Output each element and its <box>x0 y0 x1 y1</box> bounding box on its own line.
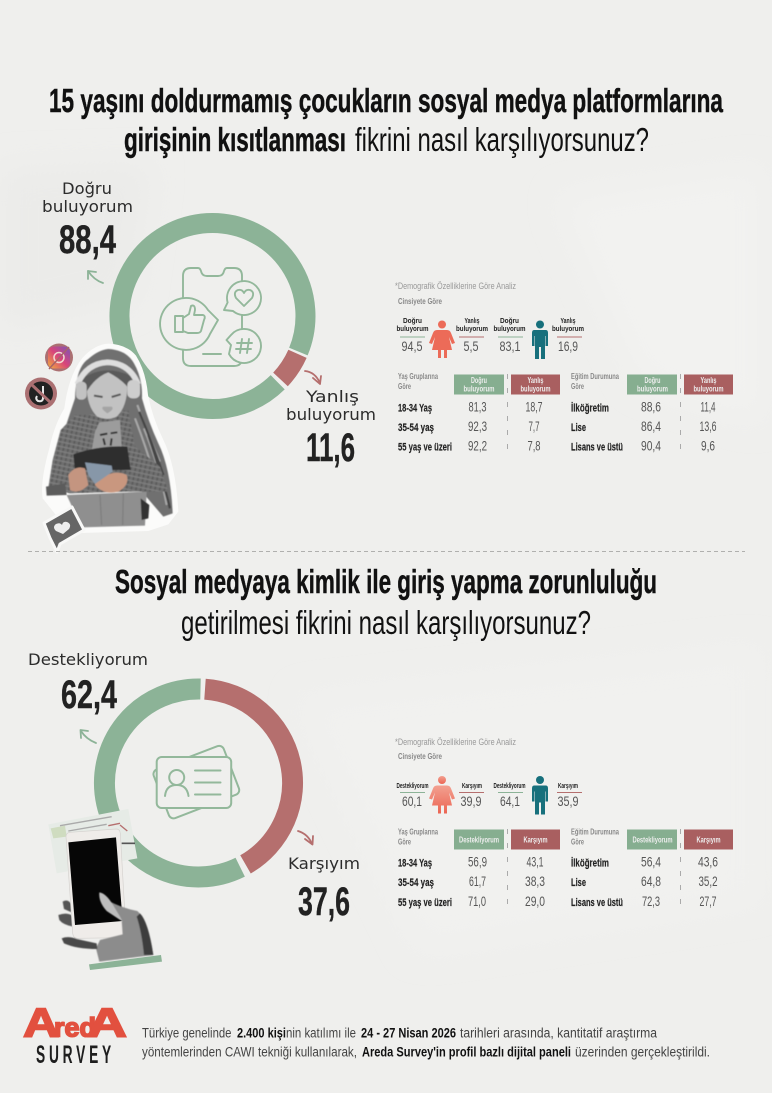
table: age groups: 18-34 Yaş <box>398 858 432 870</box>
arrow: red two <box>298 831 313 844</box>
gender: women support: Destekliyorum <box>396 781 429 790</box>
gender: women disagree: 5,5 <box>464 338 479 354</box>
demographics panel: question one <box>395 281 733 458</box>
table: education: 13,6 <box>700 418 717 434</box>
icon: woman <box>429 776 455 814</box>
table: age groups: 55 yaş ve üzeri <box>398 897 452 909</box>
gender: women agree: Doğru <box>403 316 422 325</box>
label: yanlış buluyorum 11,6: buluyorum <box>286 405 376 424</box>
table: education: Lise <box>571 877 586 889</box>
gender: women agree: buluyorum <box>396 324 429 333</box>
icon: phone with social bubbles <box>160 268 261 366</box>
table: education: Doğru <box>644 376 661 385</box>
table: education: 9,6 <box>701 438 715 454</box>
table: age groups: 61,7 <box>469 873 486 889</box>
table: age groups: Yaş Gruplarına <box>398 826 438 836</box>
table: age groups: Doğru <box>471 376 487 385</box>
table: education: 11,4 <box>700 398 716 414</box>
icon: id cards <box>152 744 241 820</box>
footer: methodology note: üzerinden gerçekleştirildi. <box>575 1044 710 1060</box>
table: education: 27,7 <box>700 893 717 909</box>
label: yanlış buluyorum 11,6: Yanlış <box>305 387 359 406</box>
table: education: Eğitim Durumuna <box>571 371 619 381</box>
table: age groups <box>398 371 560 458</box>
label: doğru buluyorum 88,4: Doğru <box>62 179 112 198</box>
table: age groups: 92,3 <box>468 418 487 434</box>
gender: men agree: Doğru <box>500 316 519 325</box>
table: education: Göre <box>571 836 584 846</box>
gender: men disagree <box>552 316 584 354</box>
footer: methodology note: yöntemlerinden CAWI tekniği kullanılarak, <box>142 1044 357 1060</box>
table: age groups: 43,1 <box>526 854 544 870</box>
photo: girl with phone <box>42 344 178 533</box>
table: age groups: Destekliyorum <box>459 836 499 844</box>
table: education: Yanlış <box>700 376 717 385</box>
table: age groups: 92,2 <box>468 438 487 454</box>
table: age groups: Yaş Gruplarına <box>398 371 438 381</box>
footer: methodology note: Türkiye genelinde <box>142 1026 232 1040</box>
gender: men agree: 83,1 <box>500 338 521 354</box>
table: age groups: Göre <box>398 836 411 846</box>
note heading: *Demografik Özelliklerine Göre Analiz <box>395 281 516 291</box>
donut chart: question one <box>119 223 305 409</box>
label: yanlış buluyorum 11,6 <box>286 387 376 470</box>
gender: men support <box>494 781 526 809</box>
label: destekliyorum 62,4: 62,4 <box>61 673 118 717</box>
table: education: İlköğretim <box>571 402 609 414</box>
table: age groups: 35-54 yaş <box>398 422 434 434</box>
gender: men disagree: 16,9 <box>558 338 578 354</box>
gender: men oppose <box>557 781 582 809</box>
table: education: Eğitim Durumuna <box>571 826 619 836</box>
table: age groups: 56,9 <box>468 854 487 870</box>
gender: women oppose: 39,9 <box>460 793 482 809</box>
icon: man <box>532 776 548 814</box>
table: age groups: 18,7 <box>526 398 543 414</box>
table: age groups: 7,8 <box>528 438 541 454</box>
table: age groups: Göre <box>398 381 411 391</box>
table: education: 56,4 <box>641 854 661 870</box>
gender: women agree: 94,5 <box>402 338 423 354</box>
table: education <box>571 371 733 458</box>
logo: areda survey: red <box>54 1012 96 1042</box>
table: education: 90,4 <box>641 438 661 454</box>
gender heading: Cinsiyete Göre <box>398 751 442 761</box>
icon: instagram badge <box>45 344 73 372</box>
note heading: *Demografik Özelliklerine Göre Analiz <box>395 737 516 747</box>
label: karşıyım 37,6 <box>288 854 360 924</box>
logo: areda survey <box>23 1000 127 1069</box>
label: doğru buluyorum 88,4: buluyorum <box>42 197 133 216</box>
gender: women disagree: Yanlış <box>464 316 480 325</box>
gender: men agree: buluyorum <box>494 324 526 333</box>
gender: men support: Destekliyorum <box>494 781 526 790</box>
label: doğru buluyorum 88,4 <box>42 179 133 262</box>
table: education: Lisans ve üstü <box>571 897 623 909</box>
table: age groups <box>398 826 560 913</box>
donut chart: question two <box>104 689 293 877</box>
label: destekliyorum 62,4 <box>28 650 148 717</box>
gender: women support: 60,1 <box>402 793 422 809</box>
gender: women support <box>396 781 429 809</box>
footer: methodology note: 24 - 27 Nisan 2026 <box>361 1026 456 1040</box>
gender: men oppose: 35,9 <box>558 793 579 809</box>
table: age groups: buluyorum <box>464 384 494 394</box>
gender: women disagree: buluyorum <box>456 324 488 333</box>
title: question one: girişinin kısıtlanması <box>124 121 346 158</box>
title: question one: fikrini nasıl karşılıyorsunuz? <box>355 121 649 158</box>
table: education: buluyorum <box>637 384 668 394</box>
table: age groups: 55 yaş ve üzeri <box>398 442 452 454</box>
table: age groups: 29,0 <box>525 893 545 909</box>
table: age groups: 18-34 Yaş <box>398 402 432 414</box>
arrow: green one <box>88 271 103 283</box>
table: age groups: Yanlış <box>528 376 544 385</box>
table: education <box>571 826 733 913</box>
gender: women oppose: Karşıyım <box>462 781 482 790</box>
icon: man <box>532 320 548 359</box>
gender: men support: 64,1 <box>500 793 520 809</box>
gender: women oppose <box>459 781 484 809</box>
demographics panel: question two <box>395 737 733 913</box>
label: karşıyım 37,6: 37,6 <box>298 880 350 924</box>
footer: methodology note: 2.400 kişi <box>237 1026 286 1040</box>
icon: heart message tag <box>44 507 84 552</box>
table: education: 86,4 <box>641 418 661 434</box>
table: education: Destekliyorum <box>632 836 672 844</box>
label: doğru buluyorum 88,4: 88,4 <box>59 218 117 262</box>
label: destekliyorum 62,4: Destekliyorum <box>28 650 148 669</box>
gender: women agree <box>396 316 429 354</box>
table: age groups: 81,3 <box>468 398 487 414</box>
footer: methodology note: Areda Survey'in profil bazlı dijital paneli <box>362 1044 571 1060</box>
label: karşıyım 37,6: Karşıyım <box>288 854 360 873</box>
table: education: Lisans ve üstü <box>571 442 623 454</box>
table: age groups: Karşıyım <box>524 836 548 844</box>
table: education: Göre <box>571 381 584 391</box>
arrow: green two <box>80 730 96 743</box>
table: education: 72,3 <box>642 893 660 909</box>
gender: men agree <box>494 316 526 354</box>
table: age groups: 71,0 <box>468 893 486 909</box>
title: question two: getirilmesi fikrini nasıl karşılıyorsunuz? <box>181 604 591 641</box>
gender heading: Cinsiyete Göre <box>398 296 442 306</box>
logo: areda survey: A <box>23 1000 59 1046</box>
table: education: buluyorum <box>694 384 724 394</box>
arrow: red one <box>305 371 321 384</box>
gender: men disagree: Yanlış <box>560 316 576 325</box>
table: education: 64,8 <box>641 873 661 889</box>
footer: methodology note <box>142 1026 710 1060</box>
table: age groups: 7,7 <box>528 418 540 434</box>
table: education: 43,6 <box>698 854 718 870</box>
table: education: 35,2 <box>698 873 718 889</box>
footer: methodology note: tarihleri arasında, kantitatif araştırma <box>460 1026 657 1040</box>
gender: women disagree <box>456 316 488 354</box>
table: education: İlköğretim <box>571 856 609 870</box>
label: yanlış buluyorum 11,6: 11,6 <box>306 426 355 470</box>
icon: woman <box>429 320 455 358</box>
table: age groups: 38,3 <box>525 873 545 889</box>
table: education: Karşıyım <box>696 836 720 844</box>
table: age groups: 35-54 yaş <box>398 877 434 889</box>
icon: tiktok banned badge <box>25 378 57 410</box>
table: age groups: buluyorum <box>520 384 550 394</box>
photo: hand holding phone with id card <box>48 809 162 970</box>
title: question two <box>115 563 657 641</box>
table: education: Lise <box>571 422 586 434</box>
table: education: 88,6 <box>641 398 661 414</box>
gender: men disagree: buluyorum <box>552 324 584 333</box>
logo: areda survey: SURVEY <box>36 1042 115 1069</box>
logo: areda survey: A <box>87 1000 127 1046</box>
gender: men oppose: Karşıyım <box>558 781 578 790</box>
footer: methodology note: nin katılımı ile <box>286 1026 356 1040</box>
title: question one <box>49 82 723 158</box>
